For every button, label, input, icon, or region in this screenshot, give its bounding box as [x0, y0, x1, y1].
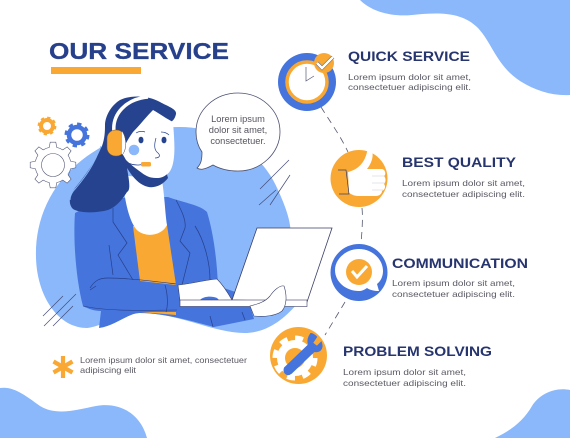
neck [122, 175, 167, 235]
speed lines [43, 160, 290, 326]
service: best quality: BEST QUALITY [402, 155, 516, 170]
service: quick service [348, 49, 471, 92]
footnote: adipiscing elit [80, 365, 137, 375]
orange gear [39, 118, 55, 134]
service: problem solving: consectetuer adipiscing elit. [343, 378, 466, 388]
fingers on keyboard [200, 297, 219, 300]
hair highlight [70, 146, 101, 200]
arm lower edge [83, 306, 177, 310]
corner blob: top right [360, 0, 570, 95]
mouth and microphone [128, 163, 146, 165]
icon: clock [278, 53, 336, 111]
service: communication: Lorem ipsum dolor sit amet, [392, 278, 515, 288]
title: OUR SERVICE [49, 38, 229, 64]
service: communication: consectetuer adipiscing elit. [392, 289, 515, 299]
icon: chat check [330, 244, 388, 301]
service: communication [392, 256, 528, 299]
service: problem solving: PROBLEM SOLVING [343, 344, 492, 359]
footnote: Lorem ipsum dolor sit amet, consectetuer [80, 355, 247, 365]
blue gear [66, 124, 88, 146]
icon: thumbs up [330, 148, 388, 207]
hair [70, 96, 176, 212]
service: best quality [402, 155, 525, 199]
laptop screen [232, 228, 332, 302]
headphone [107, 130, 125, 156]
speech bubble: Lorem ipsum [211, 114, 265, 124]
service: best quality: consectetuer adipiscing elit. [402, 189, 525, 199]
corner blob: bottom right [495, 389, 570, 438]
jacket lines [90, 200, 245, 327]
service: problem solving: Lorem ipsum dolor sit amet, [343, 367, 466, 377]
corner blob: bottom left [0, 388, 147, 438]
eyes and nose [136, 131, 169, 158]
footnote [80, 355, 247, 375]
title underline [51, 67, 141, 74]
speech bubble: dolor sit amet, [209, 125, 267, 135]
speech bubble: consectetuer. [210, 136, 266, 146]
shirt [133, 225, 176, 285]
laptop base [180, 300, 307, 306]
dashed connectors [321, 107, 362, 335]
icon: gear and wrench [270, 327, 327, 384]
gears [30, 118, 88, 188]
background blob [36, 127, 296, 333]
speech bubble [196, 93, 280, 171]
service: quick service: Lorem ipsum dolor sit amet, [348, 72, 471, 82]
service: problem solving [343, 344, 492, 388]
wrist hand on keyboard [178, 279, 232, 301]
illustration: support agent [36, 96, 332, 333]
icon: asterisk [54, 356, 72, 378]
face [122, 110, 174, 178]
holding hand [250, 286, 286, 316]
service: quick service: consectetuer adipiscing elit. [348, 82, 471, 92]
service: communication: COMMUNICATION [392, 256, 528, 271]
cheek [129, 145, 139, 155]
headband [114, 97, 148, 132]
service: quick service: QUICK SERVICE [348, 49, 470, 64]
jacket [74, 197, 254, 328]
service: best quality: Lorem ipsum dolor sit amet, [402, 178, 525, 188]
outline gear [30, 142, 76, 188]
